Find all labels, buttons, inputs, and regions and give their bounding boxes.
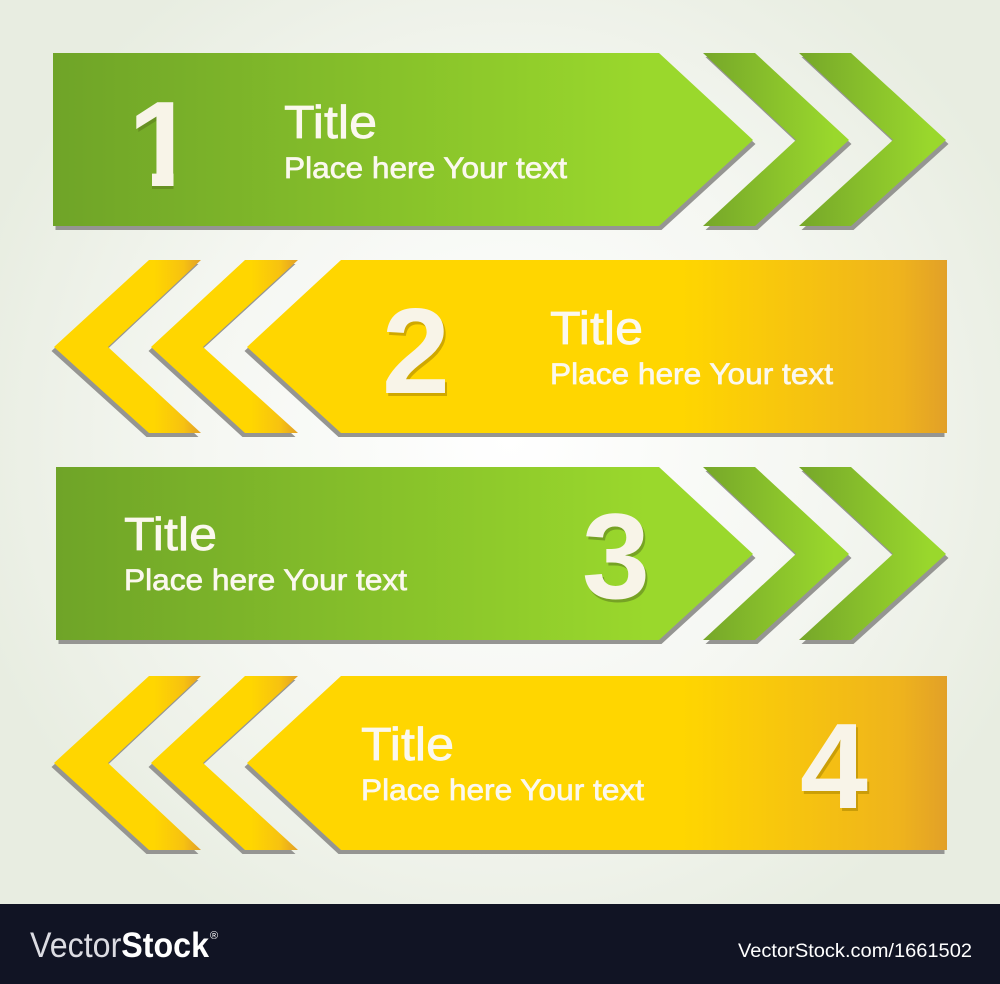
banner 3: green right-pointing arrow [56,467,948,644]
footer url: VectorStock.com/1661502 [738,941,972,962]
chevron 2a [54,260,201,433]
number 2: 2 [382,283,450,419]
banner 4: yellow left-pointing arrow [52,676,947,854]
chevron 4b [151,676,298,850]
number 1 [136,102,174,189]
title 3: Title [124,508,217,560]
number 2: 2 [384,286,452,422]
registered mark: ® [210,930,218,942]
text 3: Place here Your text [124,564,408,597]
number 3: 3 [584,491,652,627]
title 2: Title [550,302,643,354]
chevron 1b [799,53,946,226]
chevron 4a [54,676,201,850]
text 1: Place here Your text [284,152,568,185]
number 3: 3 [582,488,650,624]
number 1: 1 [130,79,198,215]
chevron 1a [703,53,849,226]
footer logo: VectorStock [30,926,209,965]
banner 2: yellow left-pointing arrow [52,260,947,437]
title 4: Title [361,718,454,770]
title 1: Title [284,96,377,148]
text 4: Place here Your text [361,774,645,807]
footer bar [0,904,1000,984]
text 2: Place here Your text [550,358,834,391]
chevron 3b [799,467,946,640]
chevron 2b [151,260,298,433]
banner 1: green right-pointing arrow [53,53,948,230]
number 1: 1 [128,76,196,212]
chevron 3a [703,467,849,640]
number 4: 4 [800,698,868,834]
number 4: 4 [802,701,870,837]
